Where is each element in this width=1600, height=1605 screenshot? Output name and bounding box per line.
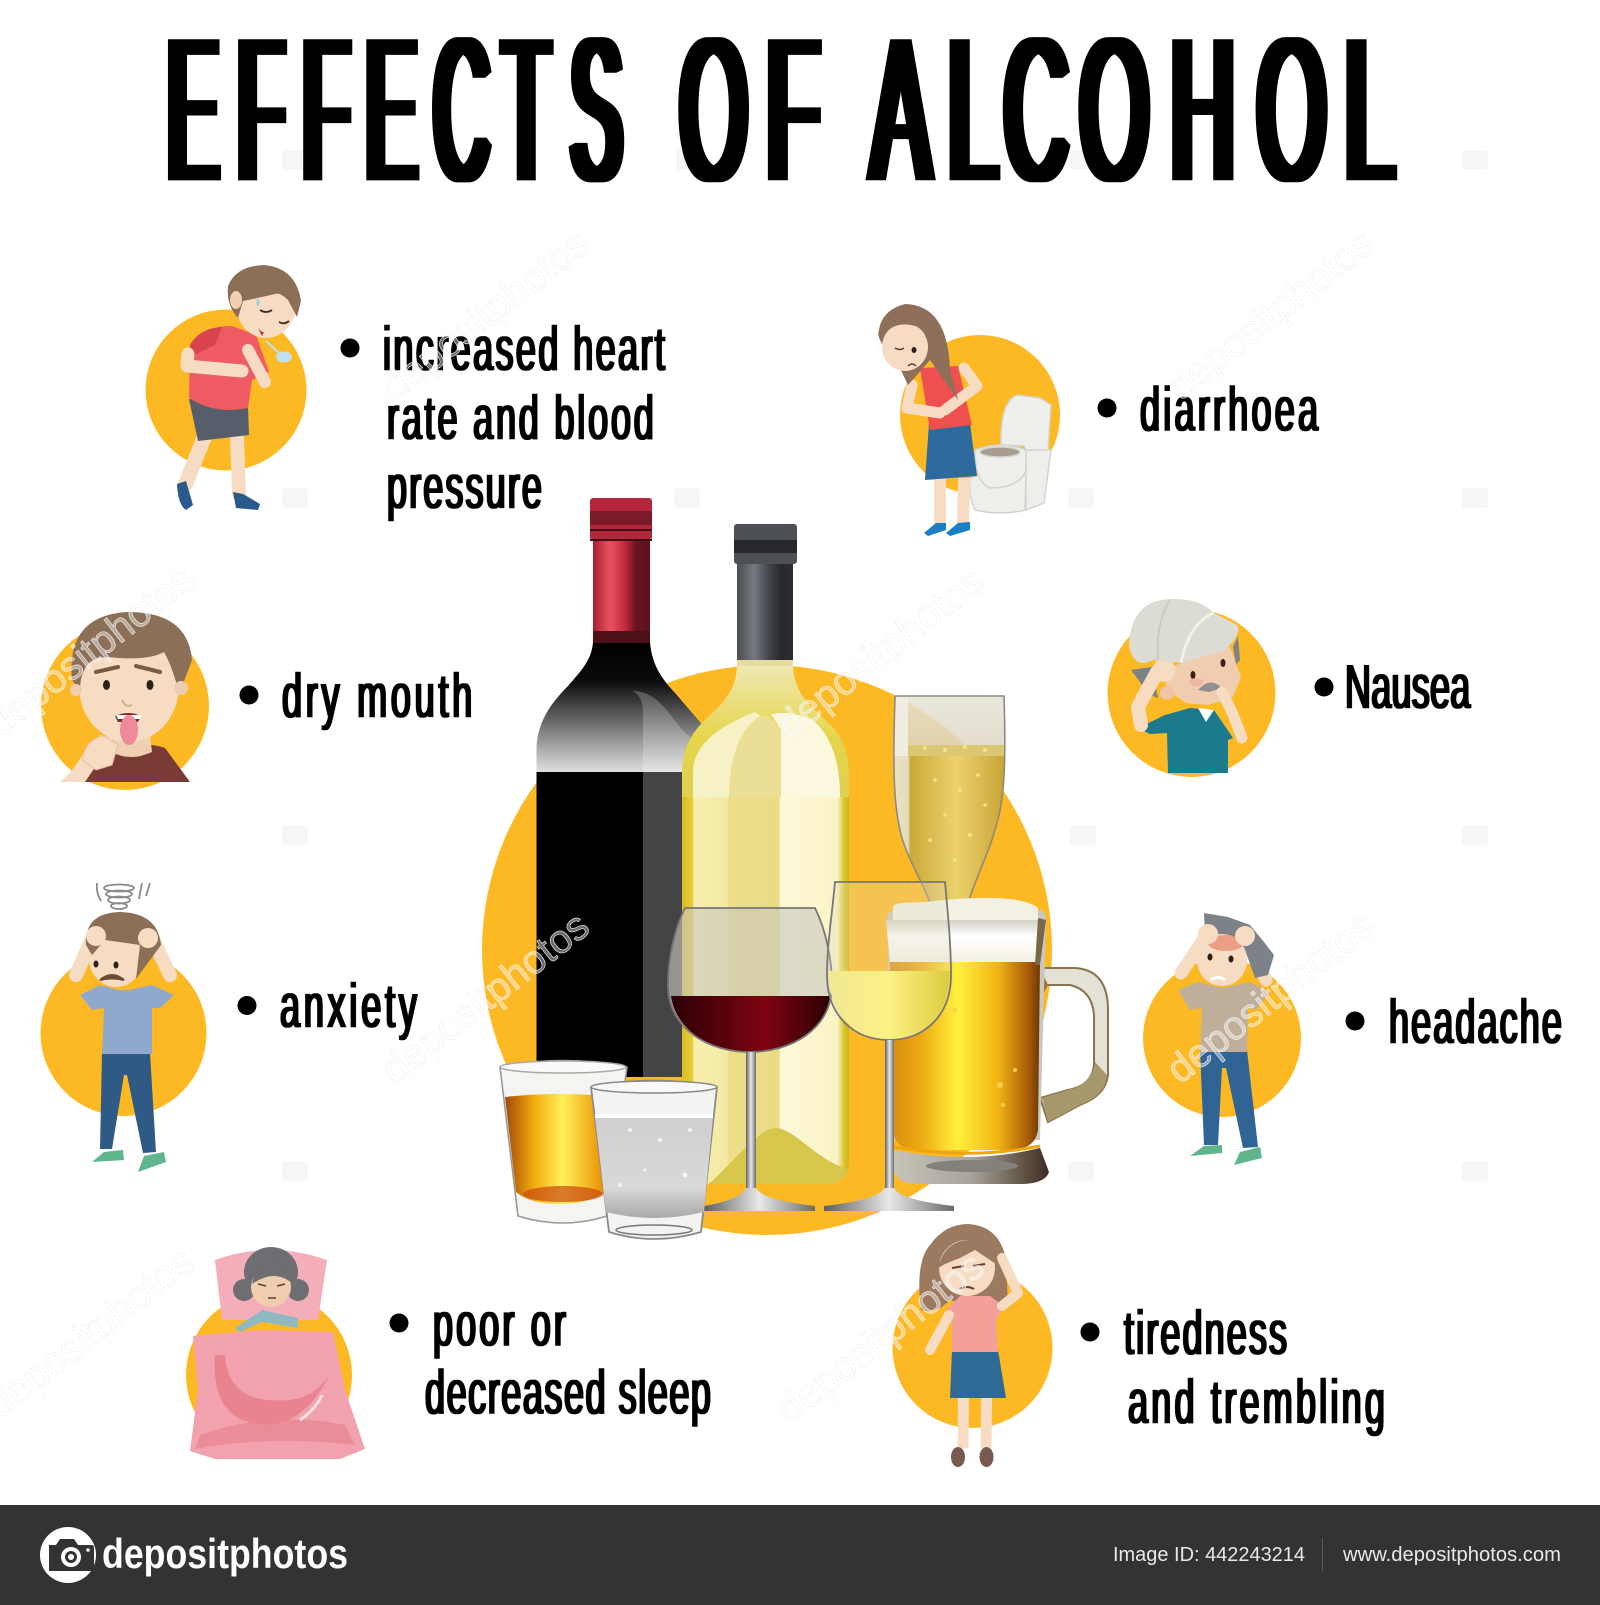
icon: anxious man <box>76 883 174 1172</box>
panel: dry mouth <box>41 612 472 790</box>
website: www.depositphotos.com <box>1342 1544 1561 1566</box>
title <box>168 0 1394 225</box>
central illustration: alcoholic drinks <box>482 498 1108 1239</box>
watermarks: depositphotos <box>768 559 993 747</box>
icon: man with dry tongue <box>60 612 192 782</box>
label: decreased sleep <box>425 1357 711 1427</box>
label: anxiety <box>280 971 417 1040</box>
panel: nausea <box>1108 599 1471 777</box>
watermarks: depositphotos <box>373 904 598 1092</box>
icon: woman holding stomach <box>878 304 977 536</box>
icon: tired woman <box>919 1224 1018 1467</box>
bullet <box>1346 1012 1364 1030</box>
icon: man with headache <box>1178 913 1274 1165</box>
bullet <box>1080 1322 1100 1342</box>
bullet <box>1314 678 1334 696</box>
logo wordmark: depositphotos <box>102 1530 348 1577</box>
label: diarrhoea <box>1140 374 1319 444</box>
red wine bottle <box>536 498 705 1077</box>
bullet <box>240 686 258 704</box>
champagne glass <box>890 696 1010 905</box>
label: pressure <box>387 452 542 521</box>
icon: camera logo <box>40 1527 96 1583</box>
title: OF <box>680 0 819 225</box>
yellow circle <box>146 310 306 470</box>
panel: poor or decreased sleep <box>186 1247 711 1459</box>
title: ALCOHOL <box>871 0 1394 224</box>
yellow circle <box>1143 959 1301 1117</box>
watermarks: depositphotos <box>1158 221 1383 409</box>
yellow circle <box>900 335 1060 495</box>
watermarks: depositphotos <box>768 1244 993 1432</box>
label: increased heart <box>383 314 665 383</box>
amber shot glass <box>500 1060 627 1223</box>
watermarks: depositphotos <box>373 221 598 409</box>
label: dry mouth <box>282 661 472 730</box>
label <box>1124 1298 1385 1436</box>
bullet <box>238 996 256 1015</box>
icon: man with cap, nauseous <box>1129 599 1242 773</box>
icon: woman in bed <box>190 1247 365 1459</box>
watermarks <box>0 221 1383 1432</box>
yellow circle <box>40 950 206 1116</box>
white wine bottle <box>680 524 852 1190</box>
label: and trembling <box>1128 1367 1385 1436</box>
watermarks: depositphotos <box>1158 904 1383 1092</box>
footer bar <box>0 1505 1600 1605</box>
label <box>425 1289 711 1427</box>
icon: person short of breath <box>177 265 301 510</box>
yellow circle <box>41 622 209 790</box>
water glass <box>591 1080 717 1239</box>
beer mug <box>886 898 1108 1184</box>
label: poor or <box>433 1289 566 1359</box>
title: EFFECTS <box>168 0 622 224</box>
bullet <box>1098 398 1116 418</box>
panel: headache <box>1143 913 1562 1165</box>
panel: increased heart rate and blood pressure <box>146 265 665 521</box>
panel: tiredness and trembling <box>892 1224 1385 1467</box>
label: headache <box>1389 987 1562 1056</box>
icon: toilet <box>970 395 1051 513</box>
label: Nausea <box>1345 652 1471 721</box>
yellow background circle <box>482 665 1052 1235</box>
yellow circle <box>892 1268 1052 1428</box>
white wine glass <box>824 882 954 1211</box>
red wine glass <box>668 908 832 1211</box>
label <box>383 314 665 521</box>
faint camera watermark marks <box>282 150 1488 1181</box>
label: rate and blood <box>387 383 654 452</box>
panel: anxiety <box>40 883 417 1172</box>
label: tiredness <box>1124 1298 1287 1367</box>
image id: Image ID: 442243214 <box>1113 1544 1305 1566</box>
bullet <box>340 338 360 358</box>
bullet <box>390 1314 408 1332</box>
yellow circle <box>1108 609 1276 777</box>
panel: diarrhoea <box>878 304 1319 536</box>
yellow circle <box>186 1292 352 1458</box>
